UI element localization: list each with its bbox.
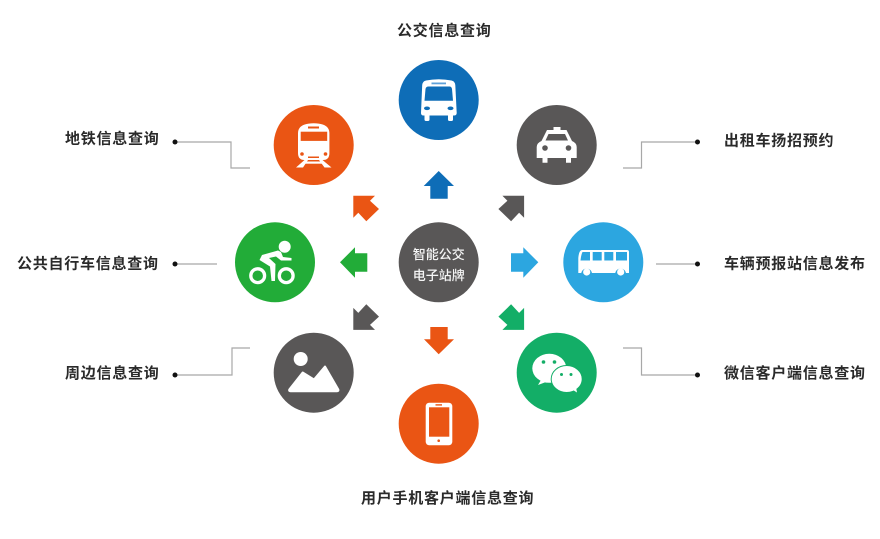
arrow: down-left to landscape bbox=[353, 304, 379, 330]
icon: bus front bbox=[399, 60, 479, 140]
label: surroundings: 周边信息查询 bbox=[65, 364, 160, 382]
center hub bbox=[399, 222, 479, 302]
label: taxi booking: 出租车扬招预约 bbox=[724, 131, 834, 149]
leader: arrival forecast bbox=[656, 262, 700, 266]
icon: taxi bbox=[517, 105, 597, 185]
icon: metro train bbox=[274, 105, 354, 185]
leader: bicycle bbox=[172, 262, 217, 266]
label: arrival forecast: 车辆预报站信息发布 bbox=[724, 255, 866, 273]
label: mobile client: 用户手机客户端信息查询 bbox=[361, 489, 534, 507]
leader: wechat bbox=[623, 348, 700, 378]
center hub: 智能公交 bbox=[413, 247, 465, 262]
icon: landscape picture bbox=[274, 333, 354, 413]
leader: surroundings bbox=[172, 348, 250, 378]
label: wechat client: 微信客户端信息查询 bbox=[724, 364, 866, 382]
label: public bicycle: 公共自行车信息查询 bbox=[17, 255, 159, 273]
leader: taxi bbox=[623, 140, 700, 168]
icon: side-view bus bbox=[563, 222, 643, 302]
center hub: 电子站牌 bbox=[413, 268, 465, 283]
arrow: down to phone bbox=[424, 327, 454, 354]
icon: bicycle rider bbox=[235, 222, 315, 302]
arrow: left to bicycle bbox=[340, 247, 367, 278]
arrow: right to side bus bbox=[511, 247, 538, 278]
icon: smartphone bbox=[399, 384, 479, 464]
arrow: down-right to wechat bbox=[498, 304, 524, 330]
arrow: up-left to metro bbox=[353, 196, 379, 221]
arrow: up to bus bbox=[424, 171, 454, 199]
label: metro information: 地铁信息查询 bbox=[65, 130, 160, 148]
icon: wechat bubbles bbox=[517, 333, 597, 413]
leader: metro bbox=[172, 140, 250, 168]
label: bus information: 公交信息查询 bbox=[397, 21, 492, 39]
arrow: up-right to taxi bbox=[498, 196, 524, 221]
